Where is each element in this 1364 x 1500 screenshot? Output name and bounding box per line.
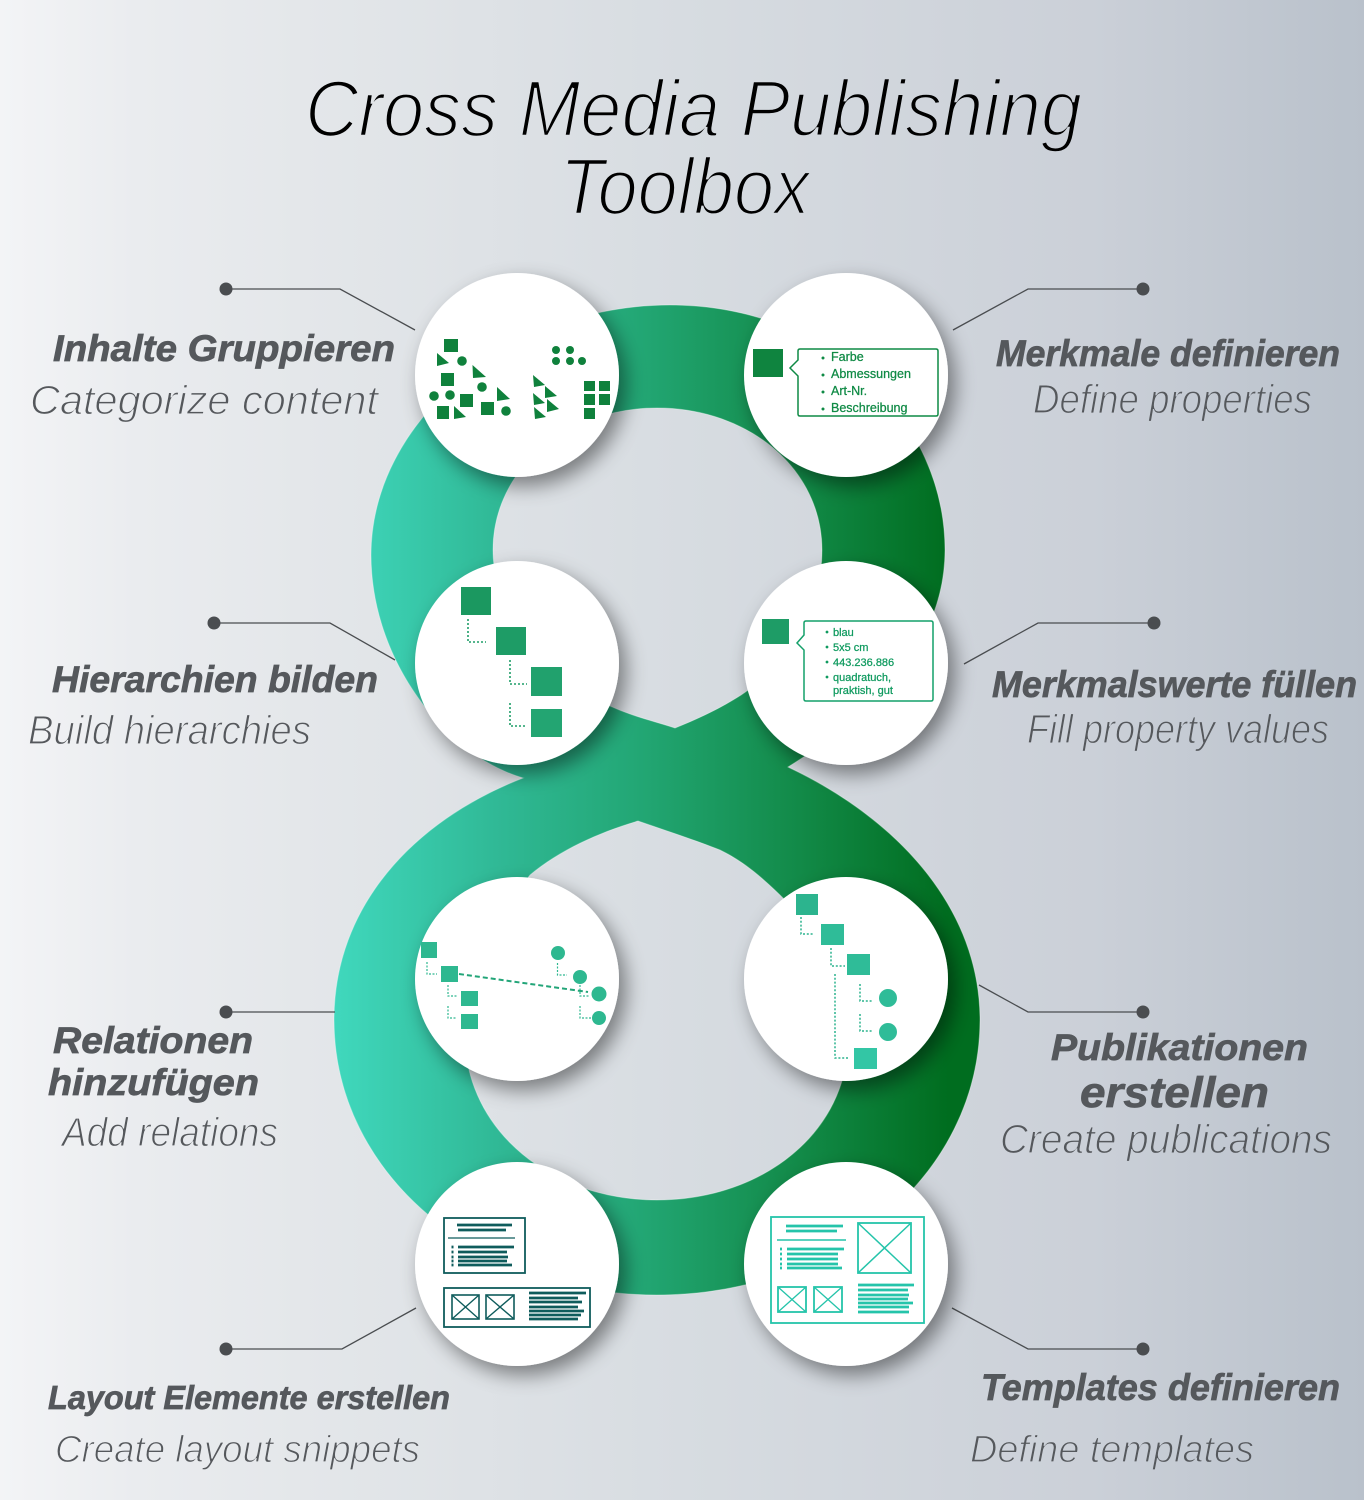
icon: properties callout: Art-Nr. xyxy=(831,384,867,398)
circle xyxy=(744,877,948,1081)
leader line xyxy=(208,616,395,660)
subheading: Categorize content xyxy=(30,377,380,423)
icon: properties callout xyxy=(753,349,938,416)
heading: erstellen xyxy=(1080,1069,1269,1117)
icon: properties callout: Farbe xyxy=(831,350,864,364)
heading: Inhalte Gruppieren xyxy=(53,328,395,369)
subheading: Create publications xyxy=(1000,1116,1332,1162)
subheading: Define properties xyxy=(1033,376,1312,422)
title: Cross Media Publishing xyxy=(305,64,1082,153)
subheading: Build hierarchies xyxy=(28,707,311,753)
heading: Merkmalswerte füllen xyxy=(992,664,1357,705)
circle xyxy=(415,561,619,765)
heading: Relationen xyxy=(53,1020,253,1061)
leader line xyxy=(220,1308,416,1356)
heading: Hierarchien bilden xyxy=(52,659,378,700)
panel: Publikationen erstellen xyxy=(744,877,1332,1162)
panel: Merkmale definieren xyxy=(744,273,1340,477)
subheading: Add relations xyxy=(59,1109,278,1155)
icon: hierarchy xyxy=(461,587,562,737)
subheading: Fill property values xyxy=(1027,706,1329,752)
icon: properties callout: Abmessungen xyxy=(831,367,911,381)
circle xyxy=(744,1162,948,1366)
icon: template wireframe xyxy=(771,1217,924,1323)
panel: Inhalte Gruppieren xyxy=(30,273,619,477)
icon: values callout: 5x5 cm xyxy=(833,642,868,654)
panel: Hierarchien bilden xyxy=(28,561,619,765)
icon: values callout: 443.236.886 xyxy=(833,657,894,669)
leader line xyxy=(220,282,415,330)
heading: Templates definieren xyxy=(981,1367,1340,1408)
figure eight ring xyxy=(334,305,980,1295)
title xyxy=(305,64,1082,231)
heading: Publikationen xyxy=(1051,1027,1308,1068)
circle xyxy=(415,1162,619,1366)
icon: values callout: blau xyxy=(833,627,854,639)
heading xyxy=(1051,1027,1308,1117)
leader line xyxy=(979,985,1150,1018)
icon: relations xyxy=(421,942,606,1029)
subheading: Create layout snippets xyxy=(55,1429,420,1471)
leader line xyxy=(952,1308,1150,1356)
panel: Merkmalswerte füllen xyxy=(744,561,1357,765)
circle xyxy=(744,561,948,765)
panel: Relationen hinzufügen xyxy=(48,877,619,1155)
circle xyxy=(415,877,619,1081)
icon: publication tree xyxy=(796,894,897,1069)
icon: layout wireframes xyxy=(444,1218,590,1327)
title: Toolbox xyxy=(560,142,813,231)
heading: hinzufügen xyxy=(48,1062,259,1103)
icon: values callout: praktish, gut xyxy=(833,685,893,697)
leader line xyxy=(220,1006,335,1018)
leader line xyxy=(953,282,1150,330)
panel: Templates definieren xyxy=(744,1162,1340,1471)
circle xyxy=(744,273,948,477)
icon: values callout xyxy=(762,619,933,701)
subheading: Define templates xyxy=(970,1429,1254,1471)
icon: properties callout: Beschreibung xyxy=(831,401,907,415)
icon: values callout: quadratuch, xyxy=(833,672,891,684)
circle xyxy=(415,273,619,477)
heading: Layout Elemente erstellen xyxy=(48,1379,450,1416)
leader line xyxy=(964,616,1160,664)
panel: Layout Elemente erstellen xyxy=(48,1162,619,1471)
heading: Merkmale definieren xyxy=(996,333,1340,374)
icon: grouped shapes xyxy=(429,339,610,419)
heading xyxy=(48,1020,259,1103)
